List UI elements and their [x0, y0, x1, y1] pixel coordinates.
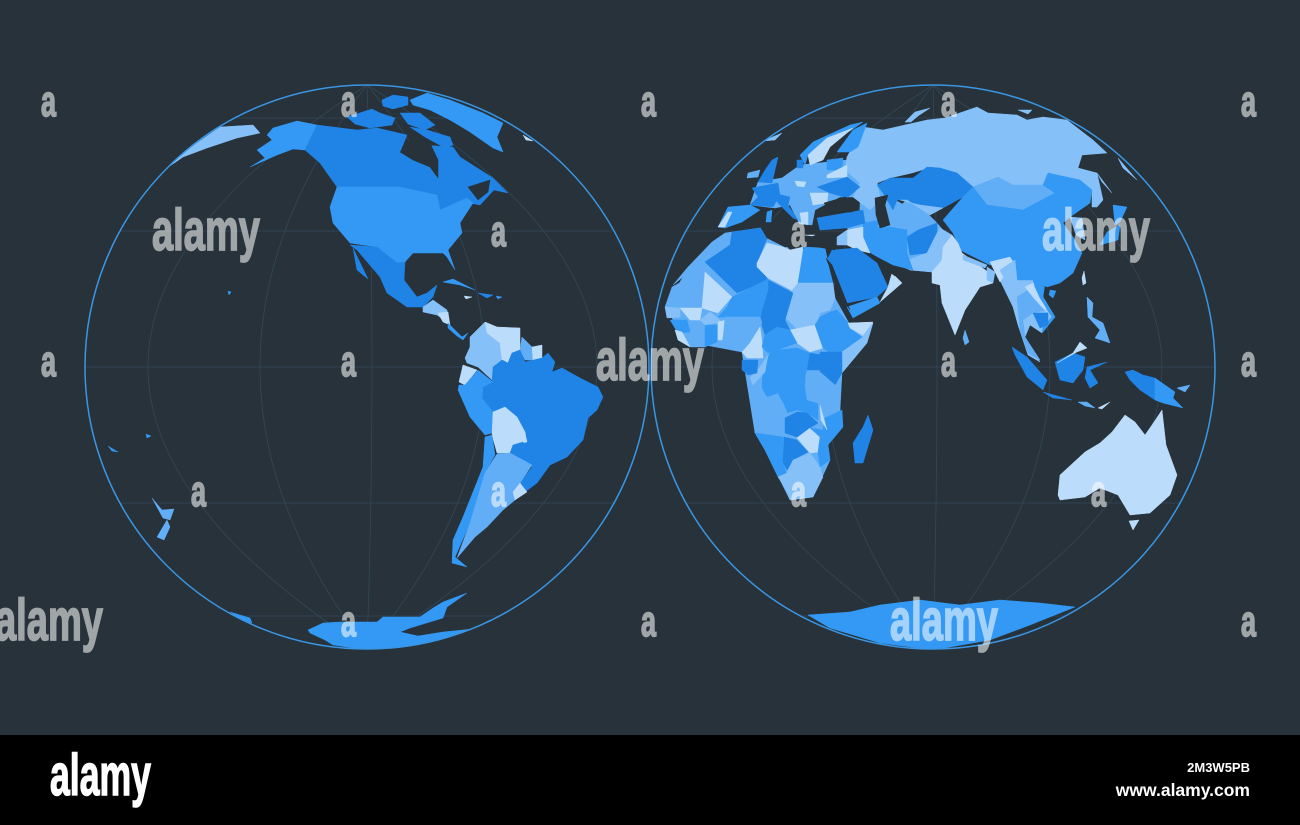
kazakhstan: [877, 167, 973, 210]
nepal and bangladesh: [963, 255, 995, 283]
canada: [305, 125, 508, 210]
watermarks: a: [641, 77, 656, 126]
underlay: africa: [665, 227, 873, 500]
watermarks: a: [791, 207, 806, 256]
indonesia and pacific: [1012, 297, 1190, 409]
pakistan: [908, 228, 952, 272]
iraq and syria: [837, 227, 870, 253]
watermarks: a: [191, 467, 206, 516]
panel: eastern hemisphere globe: [651, 85, 1215, 650]
watermarks: a: [341, 337, 356, 386]
land: eastern hemisphere: [665, 107, 1190, 650]
watermarks: a: [41, 337, 56, 386]
russia: [845, 107, 1107, 210]
pacific islands: [108, 291, 231, 452]
footer bar: [0, 735, 1300, 825]
gulf of st lawrence: [468, 180, 490, 200]
greenland: [410, 93, 503, 152]
central asia: [902, 200, 937, 223]
watermarks: alamy: [1042, 198, 1150, 263]
central america: [423, 300, 468, 340]
korea and japan: [1070, 205, 1127, 245]
red sea, mediterranean, black sea, caspian and gulf: [742, 195, 895, 310]
watermarks: a: [491, 207, 506, 256]
north africa: [673, 227, 873, 373]
underlay: middle east and central asia: [847, 183, 943, 272]
taiwan and hainan: [1049, 271, 1086, 298]
watermarks: a: [1091, 467, 1106, 516]
central africa: [742, 327, 842, 420]
sri lanka: [963, 330, 969, 345]
image id: 2M3W5PB: [1187, 760, 1250, 775]
panel: western hemisphere globe: [85, 85, 649, 650]
kamchatka and sakhalin: [1097, 158, 1137, 193]
chukotka: [167, 125, 260, 168]
arabian peninsula: [827, 248, 902, 318]
south america: [452, 322, 603, 567]
watermarks: a: [941, 77, 956, 126]
iran: [863, 220, 913, 270]
turkey: [817, 210, 865, 230]
watermarks: a: [1241, 337, 1256, 386]
watermarks: a: [341, 77, 356, 126]
watermarks: [0, 77, 1256, 653]
north europe: [797, 122, 867, 178]
footer logo: alamy: [50, 743, 151, 808]
watermarks: a: [941, 337, 956, 386]
watermarks: alamy: [152, 198, 260, 263]
australia: [1058, 410, 1177, 515]
watermarks: alamy: [596, 328, 704, 393]
watermarks: alamy: [890, 588, 998, 653]
southern africa: [753, 390, 843, 500]
watermarks: a: [1241, 597, 1256, 646]
watermarks: a: [341, 597, 356, 646]
antarctica west: [230, 593, 490, 650]
watermarks: a: [641, 597, 656, 646]
mediterranean islands: [766, 210, 815, 236]
outline: western hemisphere: [85, 85, 649, 649]
watermarks: a: [491, 467, 506, 516]
arctic islands east: [763, 108, 1032, 141]
mongolia: [973, 177, 1055, 210]
outline: eastern hemisphere: [651, 85, 1215, 649]
west europe: [718, 170, 860, 230]
website: www.alamy.com: [1115, 780, 1250, 800]
west africa: [665, 272, 763, 358]
caribbean: [443, 279, 502, 299]
underlay: europe: [750, 160, 860, 225]
alaska: [250, 121, 317, 167]
new zealand: [152, 498, 174, 540]
land: western hemisphere: [108, 93, 603, 650]
tasmania: [1129, 520, 1139, 530]
afghanistan: [907, 223, 937, 255]
mexico: [350, 245, 437, 307]
usa: [330, 187, 473, 270]
arctic islands: [347, 95, 453, 148]
hudson bay: [400, 140, 438, 178]
watermarks: a: [1241, 77, 1256, 126]
british isles: [747, 157, 778, 183]
underlay: mainland southeast asia: [995, 260, 1055, 362]
antarctica east: [808, 600, 1075, 650]
graticule: western hemisphere: [85, 85, 649, 649]
watermarks: a: [41, 77, 56, 126]
southeast asia mainland: [990, 257, 1055, 360]
china: [943, 173, 1092, 287]
graticule: eastern hemisphere: [651, 85, 1215, 649]
madagascar: [853, 415, 873, 463]
kamchatka tip: [523, 135, 533, 141]
india: [932, 235, 993, 335]
watermarks: a: [791, 467, 806, 516]
